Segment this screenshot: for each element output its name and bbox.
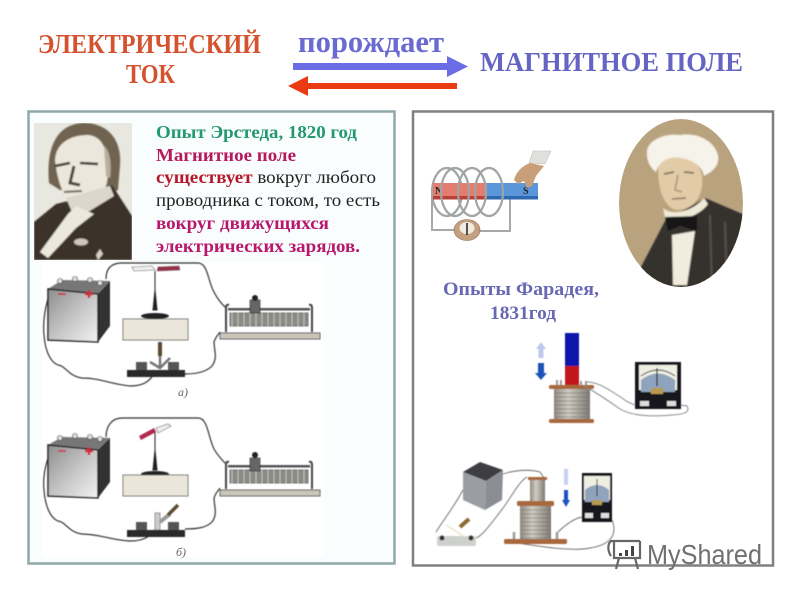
diagram b: circuit with deflected needle (44, 418, 320, 541)
title: electric current: ТОК (126, 59, 175, 89)
heading: generates: порождает (298, 24, 444, 59)
arrow: current to field (293, 56, 468, 77)
icon: bar magnet (565, 333, 579, 386)
title: electric current (38, 29, 261, 89)
text: Oersted experiment description: Магнитное поле (156, 145, 296, 165)
text: Faraday experiments caption: 1831год (490, 303, 556, 324)
watermark: MyShared logo: MyShared (647, 539, 762, 570)
icon: voltmeter (582, 473, 612, 522)
diagram a: circuit with needle at rest (44, 263, 320, 386)
icon: closed switch (127, 505, 185, 537)
icon: battery (463, 462, 503, 510)
text: Oersted experiment description: проводника с током, то есть (156, 190, 380, 210)
bar magnet: N (435, 186, 443, 197)
portrait: Oersted (34, 123, 132, 260)
text: Faraday experiments caption (443, 279, 599, 324)
diagram: magnet entering coil with voltmeter (535, 333, 688, 423)
caption: a: а) (178, 385, 188, 399)
icon: motion arrows (535, 342, 547, 380)
icon: hand (514, 151, 551, 188)
icon: magnet inside coil with galvanometer (432, 151, 551, 240)
icon: coil (549, 380, 594, 423)
icon: motion arrows (562, 469, 570, 507)
arrow: field to current (288, 76, 457, 96)
icon: rheostat (220, 452, 320, 496)
title: electric current: ЭЛЕКТРИЧЕСКИЙ (38, 29, 261, 59)
icon: nested coils (504, 477, 567, 544)
icon: battery (48, 434, 110, 498)
bar magnet: S (523, 186, 529, 197)
text: Faraday experiments caption: Опыты Фарадея, (443, 279, 599, 300)
text: Oersted experiment description (156, 122, 380, 256)
diagram: two coils with battery, switch and meter (436, 462, 614, 549)
text: Oersted experiment description: электрических зарядов. (156, 236, 360, 256)
panel: Faraday experiments (413, 112, 773, 566)
text: Oersted experiment description: вокруг движущихся (156, 213, 329, 233)
portrait: Faraday (619, 119, 745, 290)
panel: Oersted experiment (28, 112, 394, 564)
text: Oersted experiment description: существует вокруг любого (156, 167, 376, 187)
icon: galvanometer (454, 220, 480, 240)
icon: rheostat (220, 295, 320, 339)
icon: magnetic needle on stand (123, 266, 188, 340)
title: magnetic field: МАГНИТНОЕ ПОЛЕ (480, 47, 743, 77)
icon: knife switch (437, 519, 476, 546)
icon: deflected needle on stand (123, 424, 188, 496)
icon: open switch (127, 342, 185, 377)
icon: voltmeter (635, 362, 681, 409)
watermark: MyShared logo (608, 539, 762, 570)
icon: battery (48, 276, 110, 342)
caption: b: б) (176, 545, 186, 559)
bar magnet (433, 183, 538, 200)
text: Oersted experiment description: Опыт Эрстеда, 1820 год (156, 122, 357, 142)
